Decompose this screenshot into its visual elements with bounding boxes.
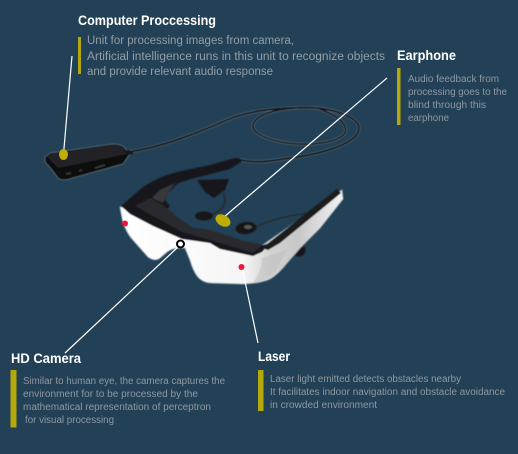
callout: earphone — [397, 47, 507, 125]
description: and provide relevant audio response — [87, 66, 273, 78]
description: processing goes to the — [408, 87, 507, 98]
heading: Earphone — [397, 47, 456, 63]
marker: left laser — [122, 220, 128, 226]
leader line: computer processing — [64, 56, 72, 154]
description: environment for to be processed by the — [23, 389, 198, 400]
marker: right laser — [238, 264, 244, 270]
accent bar — [10, 370, 16, 428]
processing unit — [45, 144, 133, 180]
callout: HD camera — [10, 350, 225, 428]
description: blind through this — [408, 100, 486, 111]
description: Laser light emitted detects obstacles nearby — [270, 374, 461, 385]
marker: HD camera — [177, 240, 184, 248]
description: in crowded environment — [270, 400, 377, 411]
marker: computer processing — [59, 149, 68, 160]
description: Audio feedback from — [408, 74, 499, 85]
callout: laser — [258, 348, 505, 411]
leader line: HD camera — [65, 247, 178, 353]
glasses black frame and near temple — [121, 158, 341, 256]
heading: HD Camera — [11, 350, 81, 366]
description: It facilitates indoor navigation and obstacle avoidance — [270, 387, 505, 398]
leader line: laser — [242, 267, 258, 343]
description: Artificial intelligence runs in this unit to recognize objects — [87, 51, 385, 63]
callout: computer processing — [78, 12, 385, 78]
accent bar — [258, 370, 264, 411]
marker: earphone — [213, 212, 233, 229]
accent bar — [397, 68, 400, 125]
glasses white shell — [120, 190, 343, 284]
accent bar — [78, 37, 81, 74]
description: earphone — [408, 113, 449, 124]
description: Similar to human eye, the camera captures the — [23, 376, 225, 387]
cable loop — [128, 108, 359, 162]
description: mathematical representation of perceptron — [23, 402, 211, 413]
glasses rear parts and earphones — [158, 179, 325, 256]
heading: Computer Proccessing — [78, 12, 216, 28]
description: Unit for processing images from camera, — [87, 35, 294, 47]
description: for visual processing — [25, 415, 114, 426]
device illustration: smart glasses and processing unit — [45, 108, 359, 284]
heading: Laser — [258, 348, 290, 364]
leader line: earphone — [224, 78, 387, 217]
